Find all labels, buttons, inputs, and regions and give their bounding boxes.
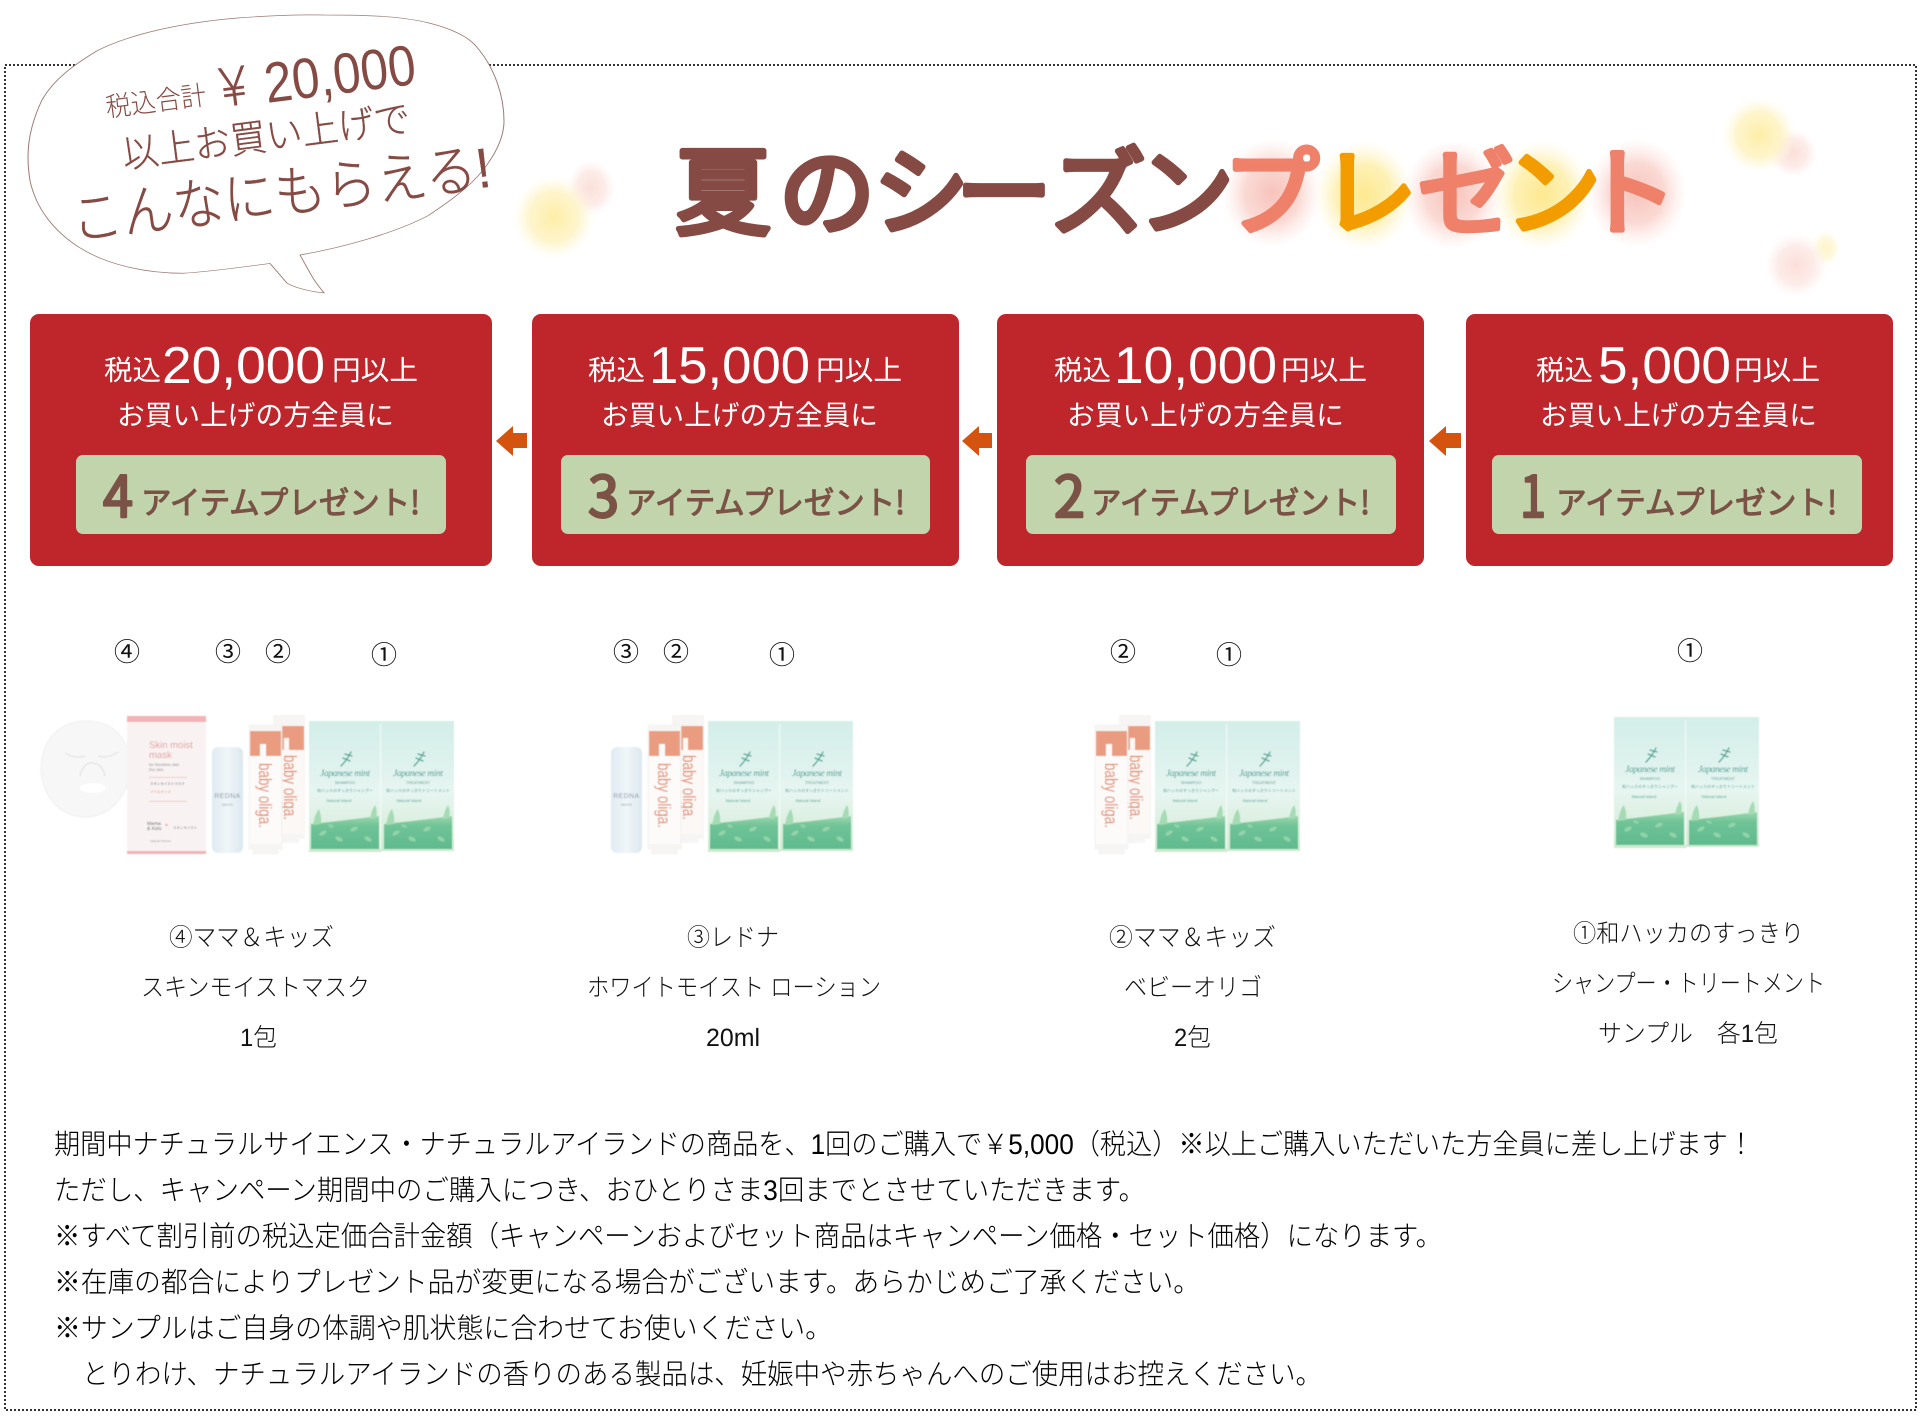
caption: tier 3: ホワイトモイスト ローション	[587, 974, 881, 1002]
title text: プ	[1223, 116, 1319, 255]
heading amount	[588, 337, 902, 395]
product group: tier 2	[1095, 715, 1300, 854]
mint sachets: TREATMENT	[1252, 780, 1277, 785]
arrow	[962, 426, 992, 456]
title text: 夏のシーズン	[675, 116, 1234, 255]
mint sachets: SHAMPOO	[335, 780, 355, 785]
title	[675, 116, 1687, 255]
circled numbers: tier 3: ③	[613, 637, 639, 667]
panel: 20,000 yen tier	[30, 314, 492, 566]
bubble text	[68, 33, 494, 252]
bottle: REDNA	[214, 793, 241, 800]
caption: tier 3: ③レドナ	[687, 924, 779, 952]
circled numbers: tier 3	[613, 637, 795, 670]
circled numbers: tier 4: ④	[114, 637, 140, 667]
mint sachets: 和ハッカのすっきりシャンプー	[716, 788, 772, 793]
baby oliga sticks: baby oliga.	[1126, 755, 1146, 820]
baby oliga sticks: baby oliga.	[679, 755, 699, 820]
baby oliga sticks	[648, 715, 704, 854]
mint sachets: TREATMENT	[406, 780, 431, 785]
circled numbers: tier 3: ①	[769, 640, 795, 670]
bottle: WHITE	[621, 803, 633, 807]
baby oliga sticks	[249, 715, 305, 854]
caption: tier 2: ベビーオリゴ	[1124, 974, 1262, 1002]
heading amount: 円以上	[1281, 355, 1367, 386]
bottle	[212, 747, 243, 853]
speech bubble	[28, 15, 504, 293]
caption: tier 2: 2包	[1174, 1024, 1211, 1052]
product group: tier 1 mint sachets: Japanese mint	[1698, 765, 1748, 775]
heading amount: 15,000	[649, 337, 810, 395]
green badge: 2	[1054, 452, 1085, 534]
baby oliga sticks: baby oliga.	[255, 763, 275, 828]
green badge: アイテムプレゼント!	[1091, 478, 1370, 524]
green badge: アイテムプレゼント!	[626, 478, 905, 524]
mask package: & Kids	[147, 826, 162, 832]
mint sachets: Japanese mint	[1166, 769, 1216, 779]
heading amount: 円以上	[1734, 355, 1820, 386]
circled numbers: tier 2	[1110, 637, 1242, 670]
caption: tier 1: シャンプー・トリートメント	[1552, 970, 1825, 998]
title text: レ	[1321, 116, 1417, 255]
caption: tier 1: サンプル 各1包	[1598, 1020, 1778, 1048]
decorative glow dots	[513, 97, 1841, 297]
mask package: スキンモイストマスク	[150, 782, 185, 786]
mint sachets: Natural Island	[1243, 798, 1267, 803]
mask package: Mama	[147, 821, 161, 827]
heading amount	[1536, 337, 1820, 395]
mint sachets: Natural Island	[1173, 798, 1197, 803]
heading subline: お買い上げの方全員に	[1067, 400, 1344, 431]
caption: tier 4: ④ママ＆キッズ	[169, 924, 334, 952]
heading subline: お買い上げの方全員に	[601, 400, 878, 431]
mint sachets: Japanese mint	[792, 769, 842, 779]
heading amount: 5,000	[1598, 337, 1731, 395]
product group: tier 1 mint sachets: SHAMPOO	[1640, 776, 1660, 781]
caption: tier 1: ①和ハッカのすっきり	[1573, 920, 1804, 948]
caption: tier 4	[141, 924, 370, 1052]
terms and notes	[54, 1129, 1754, 1391]
heading amount: 税込	[104, 355, 161, 386]
green badge	[1492, 452, 1862, 534]
baby oliga sticks	[1095, 715, 1151, 854]
green badge	[76, 452, 446, 534]
title text: ン	[1505, 116, 1601, 255]
product group: tier 1 mint sachets	[1614, 717, 1759, 848]
mint sachets: Japanese mint	[1239, 769, 1289, 779]
heading amount	[104, 337, 418, 395]
caption: tier 3: 20ml	[706, 1024, 760, 1052]
mint sachets: SHAMPOO	[734, 780, 754, 785]
heading amount: 円以上	[332, 355, 418, 386]
mint sachets: Natural Island	[397, 798, 421, 803]
heading amount	[1054, 337, 1367, 395]
panel: 5,000 yen tier	[1466, 314, 1893, 566]
circled numbers: tier 4	[114, 637, 397, 670]
mint sachets: TREATMENT	[805, 780, 830, 785]
mint sachets: 和ハッカのすっきりシャンプー	[1163, 788, 1219, 793]
product group: tier 1 mint sachets: Natural Island	[1702, 794, 1726, 799]
baby oliga sticks: baby oliga.	[280, 755, 300, 820]
bubble line 1: 税込合計	[104, 80, 208, 123]
green badge	[561, 452, 930, 534]
mint sachets: Natural Island	[327, 798, 351, 803]
heading amount: 10,000	[1114, 337, 1277, 395]
bottle: REDNA	[613, 793, 640, 800]
baby oliga sticks: baby oliga.	[1101, 763, 1121, 828]
baby oliga sticks: baby oliga.	[654, 763, 674, 828]
mint sachets: Natural Island	[726, 798, 750, 803]
product group: tier 1 mint sachets: TREATMENT	[1711, 776, 1736, 781]
green badge: アイテムプレゼント!	[141, 478, 420, 524]
panel: 15,000 yen tier	[532, 314, 959, 566]
caption: tier 3	[587, 924, 881, 1052]
heading subline: お買い上げの方全員に	[1540, 400, 1817, 431]
mint sachets	[309, 721, 454, 852]
terms and notes: ※サンプルはご自身の体調や肌状態に合わせてお使いください。	[54, 1313, 832, 1345]
mask package	[127, 716, 206, 854]
product group: tier 4	[41, 715, 454, 854]
mint sachets: Japanese mint	[393, 769, 443, 779]
bubble text: 20,000	[261, 33, 419, 116]
mint sachets: Natural Island	[796, 798, 820, 803]
bottle	[611, 747, 642, 853]
circled numbers: tier 2: ②	[1110, 637, 1136, 667]
face mask sheet	[41, 721, 130, 817]
bubble line 3: こんなにもらえる!	[68, 136, 494, 252]
title text: ゼ	[1418, 116, 1514, 255]
circled number: tier 1: ①	[1677, 636, 1703, 666]
mint sachets: Japanese mint	[320, 769, 370, 779]
green badge: アイテムプレゼント!	[1556, 478, 1837, 524]
caption: tier 4: 1包	[240, 1024, 277, 1052]
circled numbers: tier 4: ②	[265, 637, 291, 667]
circled numbers: tier 3: ②	[663, 637, 689, 667]
green badge: 3	[588, 452, 619, 534]
caption: tier 1	[1552, 920, 1825, 1048]
mint sachets	[1155, 721, 1300, 852]
arrow	[1429, 426, 1461, 456]
bubble text: ￥	[208, 55, 259, 120]
mint sachets: 和ハッカのすっきりシャンプー	[317, 788, 373, 793]
mask package: Dry skin	[149, 767, 163, 772]
mint sachets: 和ハッカのすっきりトリートメント	[785, 788, 849, 793]
circled numbers: tier 4: ①	[371, 640, 397, 670]
product group: tier 1 mint sachets: 和ハッカのすっきりシャンプー	[1622, 784, 1678, 789]
mask package: *	[165, 822, 168, 831]
mint sachets: Japanese mint	[719, 769, 769, 779]
caption: tier 2	[1109, 924, 1276, 1052]
mint sachets: 和ハッカのすっきりトリートメント	[1232, 788, 1296, 793]
mask package: スキンモイスト	[173, 826, 197, 830]
product group: tier 1 mint sachets: 和ハッカのすっきりトリートメント	[1691, 784, 1755, 789]
product group: tier 1 mint sachets: Natural Island	[1632, 794, 1656, 799]
caption: tier 4: スキンモイストマスク	[141, 974, 370, 1002]
terms and notes: ただし、キャンペーン期間中のご購入につき、おひとりさま3回までとさせていただきます。	[54, 1175, 1145, 1207]
terms and notes: とりわけ、ナチュラルアイランドの香りのある製品は、妊娠中や赤ちゃんへのご使用はお控えください。	[82, 1359, 1322, 1391]
green badge	[1026, 452, 1396, 534]
circled numbers: tier 2: ①	[1216, 640, 1242, 670]
mask package: ママ＆キッズ	[150, 790, 171, 794]
product group: tier 3	[611, 715, 853, 854]
bubble outline	[28, 15, 504, 293]
caption: tier 2: ②ママ＆キッズ	[1109, 924, 1276, 952]
heading subline: お買い上げの方全員に	[117, 400, 394, 431]
heading amount: 税込	[588, 355, 645, 386]
mask package: Skin moist	[149, 740, 193, 751]
terms and notes: ※在庫の都合によりプレゼント品が変更になる場合がございます。あらかじめご了承ください。	[54, 1267, 1200, 1299]
panel: 10,000 yen tier	[997, 314, 1424, 566]
title text: ト	[1581, 116, 1677, 255]
heading amount: 税込	[1054, 355, 1111, 386]
mint sachets: 和ハッカのすっきりトリートメント	[386, 788, 450, 793]
terms and notes: ※すべて割引前の税込定価合計金額（キャンペーンおよびセット商品はキャンペーン価格・セット価格）になります。	[54, 1221, 1442, 1253]
heading amount: 20,000	[162, 337, 325, 395]
green badge: 1	[1520, 452, 1546, 534]
mask package: mask	[149, 750, 172, 761]
heading amount: 税込	[1536, 355, 1593, 386]
green badge: 4	[103, 452, 133, 534]
circled numbers: tier 4: ③	[215, 637, 241, 667]
arrow	[496, 426, 527, 456]
heading amount: 円以上	[816, 355, 902, 386]
bubble line 2: 以上お買い上げで	[120, 98, 413, 177]
bottle: WHITE	[222, 803, 234, 807]
mask package: Natural Science	[150, 839, 172, 843]
product group: tier 1 mint sachets: Japanese mint	[1625, 765, 1675, 775]
mint sachets	[708, 721, 853, 852]
mint sachets: SHAMPOO	[1181, 780, 1201, 785]
mask package: for Sensitive skin	[149, 762, 179, 767]
title glow behind letters	[1222, 138, 1687, 250]
terms and notes: 期間中ナチュラルサイエンス・ナチュラルアイランドの商品を、1回のご購入で￥5,000（税込）※以上ご購入いただいた方全員に差し上げます！	[54, 1129, 1754, 1161]
